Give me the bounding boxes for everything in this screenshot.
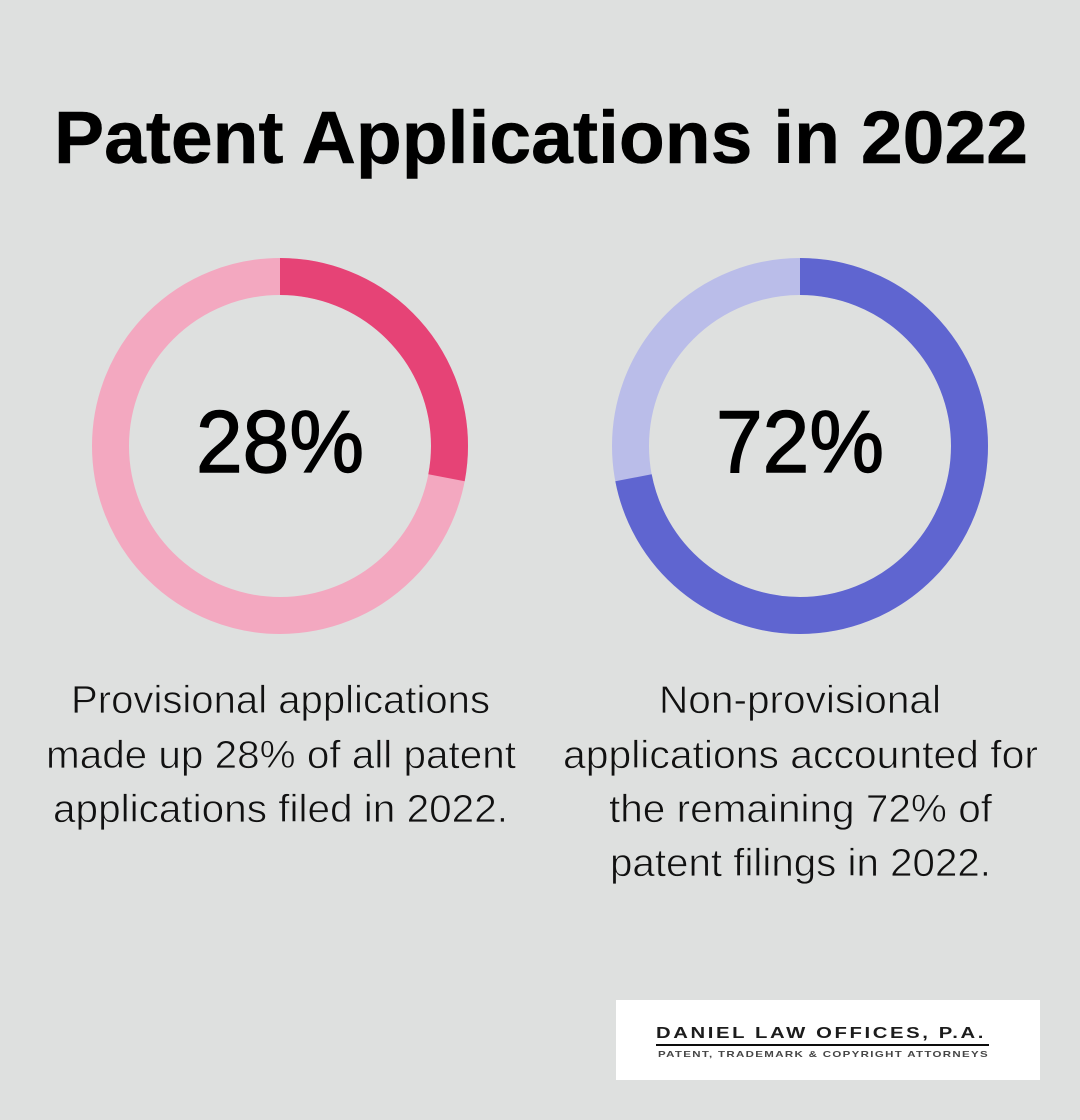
text block: provisional description: applications filed in 2022.	[53, 788, 508, 831]
text block: non-provisional description	[563, 679, 1038, 885]
text block: provisional description: Provisional applications	[71, 679, 490, 722]
title: Patent Applications in 2022	[54, 96, 1028, 179]
text block: non-provisional description: applications accounted for	[563, 734, 1038, 777]
logo: Daniel Law Offices: DANIEL LAW OFFICES, P.A.	[656, 1025, 986, 1042]
value: 28%: 28%	[196, 392, 364, 491]
text block: non-provisional description: patent filings in 2022.	[610, 842, 991, 885]
logo: Daniel Law Offices	[616, 1000, 1040, 1080]
panel: provisional applications	[46, 276, 516, 831]
logo: Daniel Law Offices: PATENT, TRADEMARK & COPYRIGHT ATTORNEYS	[658, 1049, 989, 1059]
text block: provisional description: made up 28% of all patent	[46, 734, 516, 777]
donut chart: 72%	[630, 276, 970, 616]
text block: non-provisional description: Non-provisional	[659, 679, 941, 722]
donut chart: 28%	[110, 276, 450, 616]
value: 72%: 72%	[716, 392, 884, 491]
panel: non-provisional applications	[563, 276, 1038, 885]
text block: non-provisional description: the remaining 72% of	[609, 788, 992, 831]
text block: provisional description	[46, 679, 516, 831]
